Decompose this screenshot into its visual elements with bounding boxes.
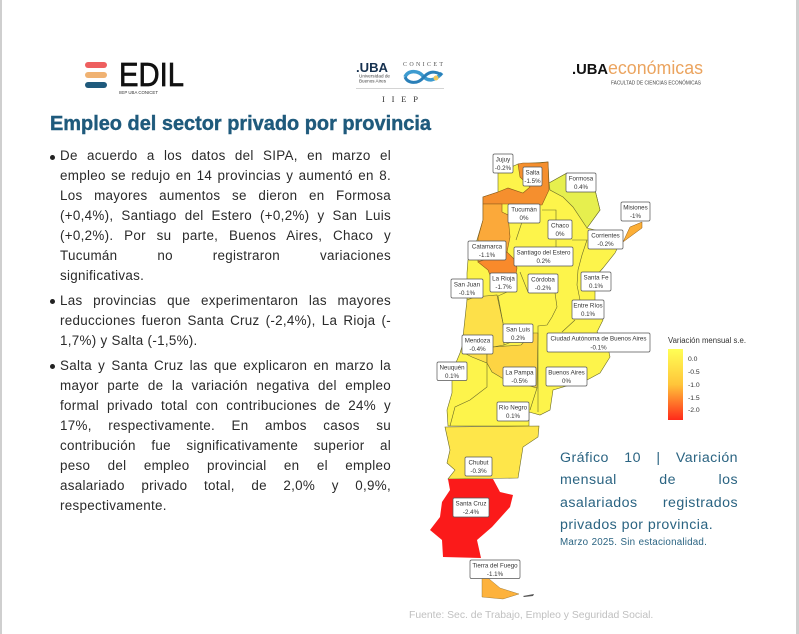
province labels: Entre Ríos [573, 302, 603, 310]
province labels: -0.1% [459, 290, 476, 297]
text block: second bullet: reducciones fueron Santa Cruz (-2,4%), La Rioja (- [60, 313, 391, 328]
province labels: -1.1% [479, 252, 496, 259]
caption: chart title [560, 450, 738, 533]
province labels: 0% [556, 231, 565, 238]
province labels: Santiago del Estero [516, 250, 571, 256]
province: La Rioja [478, 252, 517, 280]
province labels [437, 154, 650, 578]
province: Catamarca [478, 204, 510, 262]
province labels: -1.1% [487, 571, 504, 578]
caption: chart title: Gráfico 10 | Variación [560, 450, 738, 466]
province labels: 0.1% [445, 373, 460, 380]
province labels: 0.1% [589, 283, 604, 290]
legend: Variación mensual s.e. [668, 336, 746, 345]
province: Santa Cruz [430, 479, 513, 558]
text block: third bullet: asalariado privado total, de 2,0% y 0,9%, [60, 478, 391, 493]
caption: subtitle: Marzo 2025. Sin estacionalidad. [560, 537, 707, 548]
legend [668, 336, 746, 420]
caption: chart title: asalariados registrados [560, 495, 738, 511]
text block: second bullet [50, 293, 391, 348]
text block: third bullet [50, 358, 391, 513]
text block: first bullet: Los mayores aumentos se dieron en Formosa [60, 188, 391, 203]
province labels: -0.3% [470, 468, 487, 475]
title: Empleo del sector privado por provincia [50, 113, 432, 135]
province labels: -0.2% [535, 285, 552, 292]
province labels: -0.2% [597, 241, 614, 248]
legend: -1.5 [688, 395, 700, 402]
text block: third bullet: Salta y Santa Cruz las que explicaron en marzo la [60, 358, 391, 373]
province: La Pampa [487, 333, 538, 388]
province labels: -2.4% [463, 509, 480, 516]
logo: UBA CONICET IIEP: Universidad de [359, 74, 390, 80]
text block: first bullet [50, 148, 391, 283]
logo: EDIL: IIEP UBA CONICET [119, 90, 158, 95]
province labels: -0.5% [511, 378, 528, 385]
text block: third bullet: contribución fue significativamente superior al [60, 438, 391, 453]
province labels: Santa Cruz [456, 500, 486, 508]
province labels: Río Negro [499, 404, 528, 412]
province labels: Chubut [469, 460, 489, 466]
logo: UBA economicas: económicas [608, 58, 703, 78]
province: Mendoza [462, 295, 504, 363]
province labels: Córdoba [531, 276, 555, 284]
internal borders [450, 205, 587, 426]
province labels: Formosa [569, 176, 594, 182]
province labels: -0.1% [590, 344, 607, 352]
province labels: La Pampa [505, 370, 534, 376]
logo: UBA CONICET IIEP: Buenos Aires [359, 78, 387, 84]
text block: first bullet: significativas. [60, 268, 144, 283]
province labels: 0.2% [536, 258, 551, 265]
legend: -1.0 [688, 382, 700, 389]
logo: UBA economicas: .UBA [572, 62, 609, 78]
text block: first bullet: Tucumán no registraron variaciones [60, 248, 391, 263]
province labels: Misiones [623, 204, 648, 212]
province labels: 0% [562, 378, 571, 385]
province labels: Chaco [551, 222, 569, 230]
logo: EDIL: EDIL [119, 56, 184, 93]
caption: chart title: mensual de los [560, 472, 738, 488]
text block: third bullet: peso del empleo provincial en el empleo [60, 458, 391, 473]
province: Salta [483, 162, 549, 205]
province labels: 0.4% [574, 184, 589, 191]
text block: second bullet: Las provincias que experimentaron las mayores [60, 293, 391, 308]
province labels: San Luis [506, 326, 530, 334]
province labels: Jujuy [496, 156, 511, 164]
province labels: Buenos Aires [548, 370, 585, 376]
province: Formosa [549, 173, 600, 228]
province labels: Salta [525, 170, 540, 176]
province labels: Catamarca [472, 244, 503, 250]
text block: third bullet: formal privado total con contribuciones de 24% y [60, 398, 391, 413]
text block: first bullet: (+0,2%). Por su parte, Buenos Aires, Chaco y [60, 228, 391, 243]
base silhouette [447, 162, 623, 426]
text block: third bullet: mayor parte de la variación negativa del empleo [60, 378, 391, 393]
source note: Fuente: Sec. de Trabajo, Empleo y Seguridad Social. [409, 610, 653, 621]
province: Tierra del Fuego [482, 578, 519, 599]
province labels: San Juan [454, 282, 481, 288]
text block: second bullet: 1,7%) y Salta (-1,5%). [60, 333, 198, 348]
logo: UBA CONICET IIEP: .UBA [356, 60, 389, 75]
province labels: La Rioja [492, 276, 515, 282]
province labels: Tucumán [511, 206, 537, 214]
logo: UBA economicas: FACULTAD DE CIENCIAS ECONÓMICAS [611, 80, 702, 86]
legend: 0.0 [688, 356, 698, 363]
caption: chart title: privados por provincia. [560, 517, 713, 533]
province labels: 0.2% [511, 335, 526, 342]
province: Chubut [445, 426, 539, 479]
province labels: Ciudad Autónoma de Buenos Aires [551, 336, 646, 342]
province labels: -0.4% [469, 346, 486, 353]
province labels: Corrientes [591, 232, 620, 240]
province: Misiones [623, 222, 642, 242]
text block: third bullet: 17%, respectivamente. En ambos casos su [60, 418, 391, 433]
legend: -2.0 [688, 407, 700, 414]
province labels: Tierra del Fuego [472, 562, 518, 570]
province labels: Mendoza [465, 338, 491, 344]
province labels: -1.5% [524, 178, 541, 185]
province labels: -1% [630, 213, 641, 220]
province labels: 0.1% [581, 311, 596, 318]
text block: first bullet: De acuerdo a los datos del SIPA, en marzo el [60, 148, 391, 163]
province labels: -1.7% [495, 284, 512, 291]
province labels: Santa Fe [583, 274, 609, 282]
logo: UBA CONICET IIEP: IIEP [382, 94, 418, 104]
logo: UBA CONICET IIEP: CONICET [403, 62, 443, 68]
province labels: Neuquén [439, 364, 465, 372]
text block: third bullet: respectivamente. [60, 498, 167, 513]
text block: first bullet: (+0,4%), Santiago del Estero (+0,2%) y San Luis [60, 208, 391, 223]
province labels: 0% [520, 215, 529, 222]
province labels: -0.2% [495, 165, 512, 172]
legend: -0.5 [688, 369, 700, 376]
text block: first bullet: empleo se redujo en 14 provincias y aumentó en 8. [60, 168, 391, 183]
province labels: 0.1% [506, 413, 521, 420]
